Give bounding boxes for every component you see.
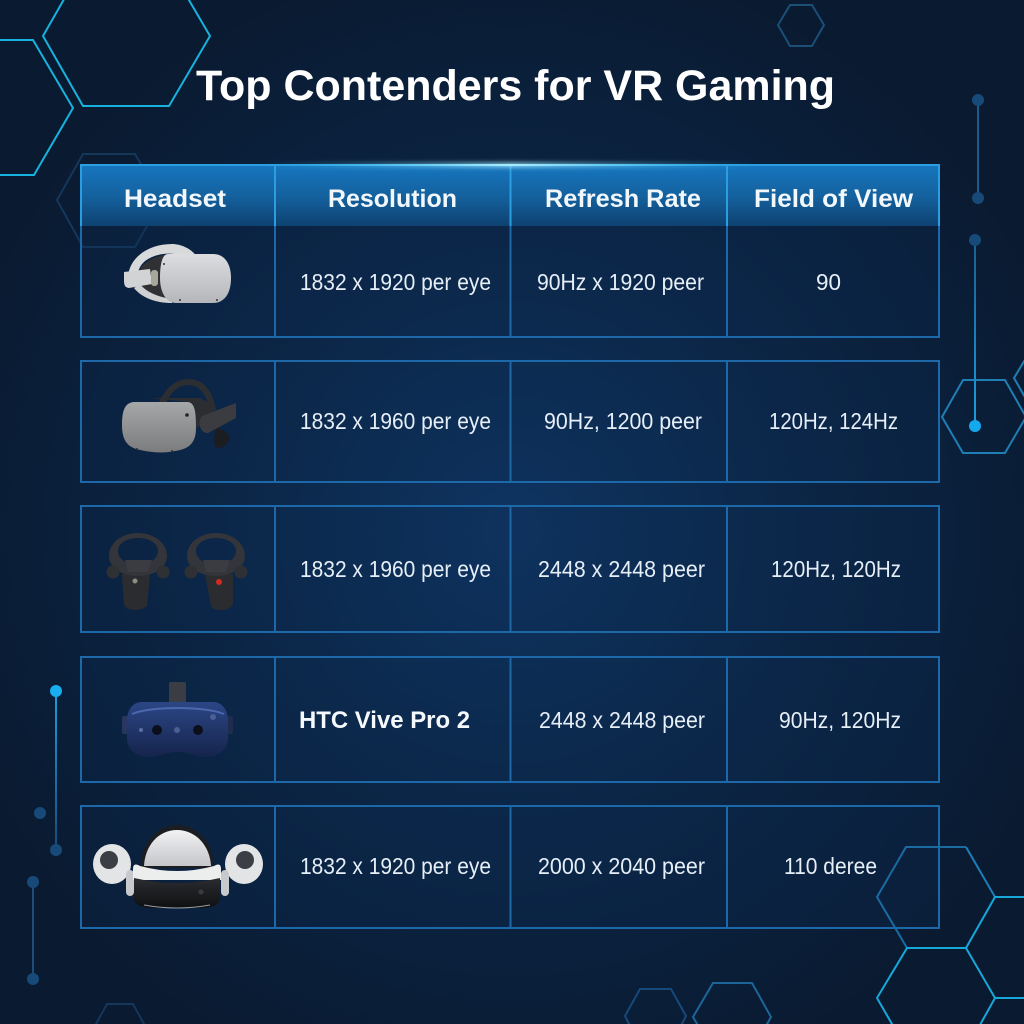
- heading: Headset: Headset: [124, 185, 227, 213]
- cell: field of view row 4: 90Hz, 120Hz: [779, 707, 901, 733]
- cell: field of view row 3: 120Hz, 120Hz: [771, 556, 901, 582]
- cell: field of view row 2: 120Hz, 124Hz: [769, 408, 898, 434]
- cell: refresh rate row 4: 2448 x 2448 peer: [539, 707, 705, 733]
- icon: grey headset: [122, 379, 236, 452]
- cell: HTC Vive Pro 2: HTC Vive Pro 2: [299, 707, 470, 734]
- column dividers row 3: [275, 506, 727, 632]
- icon: right controller: [184, 533, 248, 610]
- header highlight: [300, 164, 720, 166]
- row 5: [81, 806, 1024, 1024]
- cell: refresh rate row 2: 90Hz, 1200 peer: [544, 408, 702, 434]
- heading: Field of View: Field of View: [754, 185, 914, 213]
- row 1 with header: [81, 163, 939, 337]
- column dividers row 2: [275, 361, 727, 482]
- row 3: [81, 506, 939, 632]
- heading: Refresh Rate: Refresh Rate: [545, 185, 701, 213]
- cell: resolution row 2: 1832 x 1960 per eye: [300, 408, 491, 434]
- decorative hexagons: top left: [0, 0, 210, 247]
- decorative hexagons: top right and right edge: [778, 5, 1024, 453]
- row 3 panel: [81, 506, 939, 632]
- header bar: [81, 165, 939, 226]
- heading: Resolution: Resolution: [328, 185, 457, 213]
- row 2: [81, 361, 939, 482]
- column dividers row 4: [275, 657, 727, 782]
- cell: refresh rate row 1: 90Hz x 1920 peer: [537, 269, 704, 295]
- cell: refresh rate row 5: 2000 x 2040 peer: [538, 853, 705, 879]
- table: [81, 163, 1024, 1024]
- row 4 panel: [81, 657, 939, 782]
- circuit node lines: right: [969, 94, 984, 432]
- circuit node lines: left: [27, 685, 62, 985]
- row 5 panel: [81, 806, 939, 928]
- icon: left controller: [106, 533, 170, 610]
- cell: field of view row 5: 110 deree: [784, 853, 877, 879]
- cell: resolution row 5: 1832 x 1920 per eye: [300, 853, 491, 879]
- cell: resolution row 3: 1832 x 1960 per eye: [300, 556, 491, 582]
- icon: white dome headset with controllers: [93, 825, 263, 908]
- header glow: [260, 163, 760, 167]
- column dividers row 5: [275, 806, 727, 928]
- row 2 panel: [81, 361, 939, 482]
- decorative hexagons: bottom: [96, 983, 771, 1024]
- cell: resolution row 1: 1832 x 1920 per eye: [300, 269, 491, 295]
- cell: refresh rate row 3: 2448 x 2448 peer: [538, 556, 705, 582]
- icon: white headset: [124, 244, 231, 303]
- column dividers row 1: [275, 165, 727, 337]
- title: Top Contenders for VR Gaming: [196, 62, 835, 110]
- cell: field of view row 1: 90: [816, 269, 841, 295]
- row 4: [81, 657, 939, 782]
- row 1 panel: [81, 165, 939, 337]
- icon: blue HTC headset: [122, 682, 233, 757]
- decorative hexagons: bottom right: [877, 847, 1024, 1024]
- header border: [81, 165, 939, 226]
